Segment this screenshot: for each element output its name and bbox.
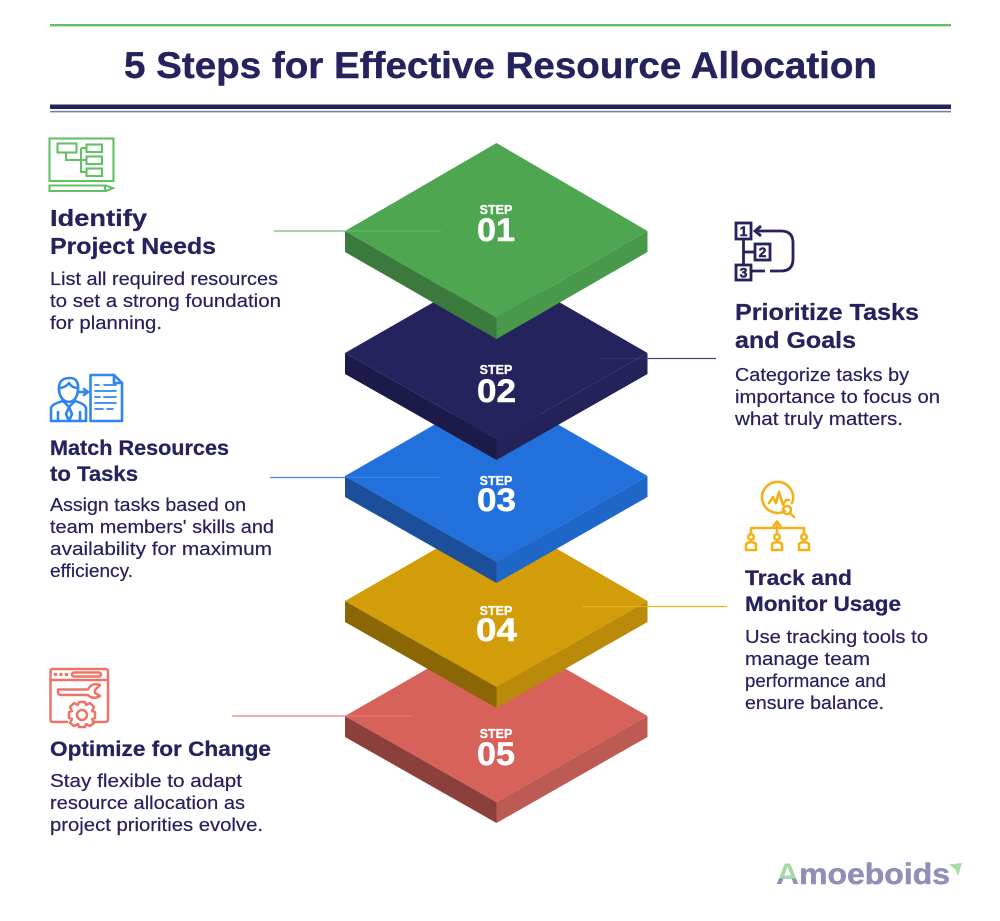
body text: project priorities evolve.: [50, 815, 263, 835]
panel: prioritize tasks and goals: [734, 223, 940, 429]
panel: optimize for change: [50, 669, 271, 835]
icon: browser with wrench and gear: [50, 669, 108, 727]
icon: person and document: [51, 375, 122, 421]
plate: step 5: [345, 629, 648, 823]
body text: for planning.: [50, 313, 162, 333]
heading: Track and: [745, 567, 852, 590]
body text: Categorize tasks by: [735, 365, 909, 385]
plate: step 5: 05: [477, 736, 515, 772]
body text: Assign tasks based on: [50, 495, 246, 515]
body text: importance to focus on: [735, 387, 940, 407]
heading: to Tasks: [50, 463, 138, 486]
icon: numbered priority list: 1: [740, 223, 748, 239]
body text: to set a strong foundation: [50, 291, 281, 311]
body text: efficiency.: [50, 561, 133, 581]
icon: numbered priority list: [736, 223, 793, 280]
connector: step 5: [232, 715, 413, 717]
connector: step 1: [274, 230, 441, 232]
body text: [734, 365, 940, 429]
plate: step 1: 01: [477, 212, 515, 248]
plate: step 4: STEP: [480, 604, 512, 618]
logo: Amoeboids: Amoeboids: [776, 858, 950, 891]
panel: identify project needs: [50, 138, 281, 333]
plate: step 1: STEP: [480, 203, 512, 217]
heading: and Goals: [735, 327, 856, 353]
icon: flowchart on board with pencil: [50, 138, 114, 191]
icon: monitoring hierarchy: [746, 482, 809, 550]
title: 5 Steps for Effective Resource Allocation: [124, 45, 877, 86]
body text: team members' skills and: [50, 517, 274, 537]
body text: availability for maximum: [50, 539, 272, 559]
panel: match resources to tasks: [50, 375, 274, 581]
icon: numbered priority list: 2: [759, 244, 767, 260]
heading: [745, 567, 901, 616]
plate: step 5: STEP: [480, 727, 512, 741]
body text: [50, 771, 263, 835]
plate: step 2: [345, 266, 648, 460]
plate: step 3: [345, 389, 648, 583]
plate: step 2: STEP: [480, 363, 512, 377]
connector: step 4: [582, 606, 727, 608]
body text: ensure balance.: [745, 693, 884, 713]
body text: resource allocation as: [50, 793, 245, 813]
plate: step 3: 03: [477, 482, 516, 518]
plate: step 2: 02: [477, 373, 516, 409]
heading: [735, 299, 919, 353]
body text: [50, 269, 281, 333]
plate: step 3: STEP: [480, 474, 512, 488]
body text: performance and: [745, 671, 886, 691]
title underline: [50, 104, 951, 112]
heading: [50, 437, 229, 486]
heading: [50, 205, 216, 259]
heading: Monitor Usage: [745, 593, 901, 616]
icon: numbered priority list: 3: [740, 264, 748, 280]
heading: Match Resources: [50, 437, 229, 460]
body text: Use tracking tools to: [745, 627, 928, 647]
plate: step 4: [345, 514, 648, 708]
heading: Project Needs: [50, 233, 216, 259]
heading: Identify: [50, 205, 147, 231]
panel: track and monitor usage: [745, 482, 928, 713]
connector: step 2: [600, 358, 716, 360]
body text: [745, 627, 928, 713]
top green rule: [50, 24, 951, 26]
body text: manage team: [745, 649, 870, 669]
connector: step 3: [270, 476, 440, 478]
heading: Prioritize Tasks: [735, 299, 919, 325]
body text: what truly matters.: [734, 409, 903, 429]
body text: [50, 495, 274, 581]
body text: List all required resources: [50, 269, 278, 289]
heading: Optimize for Change: [50, 738, 271, 761]
plate: step 4: 04: [476, 612, 517, 648]
body text: Stay flexible to adapt: [50, 771, 242, 791]
plate: step 1: [345, 143, 648, 339]
